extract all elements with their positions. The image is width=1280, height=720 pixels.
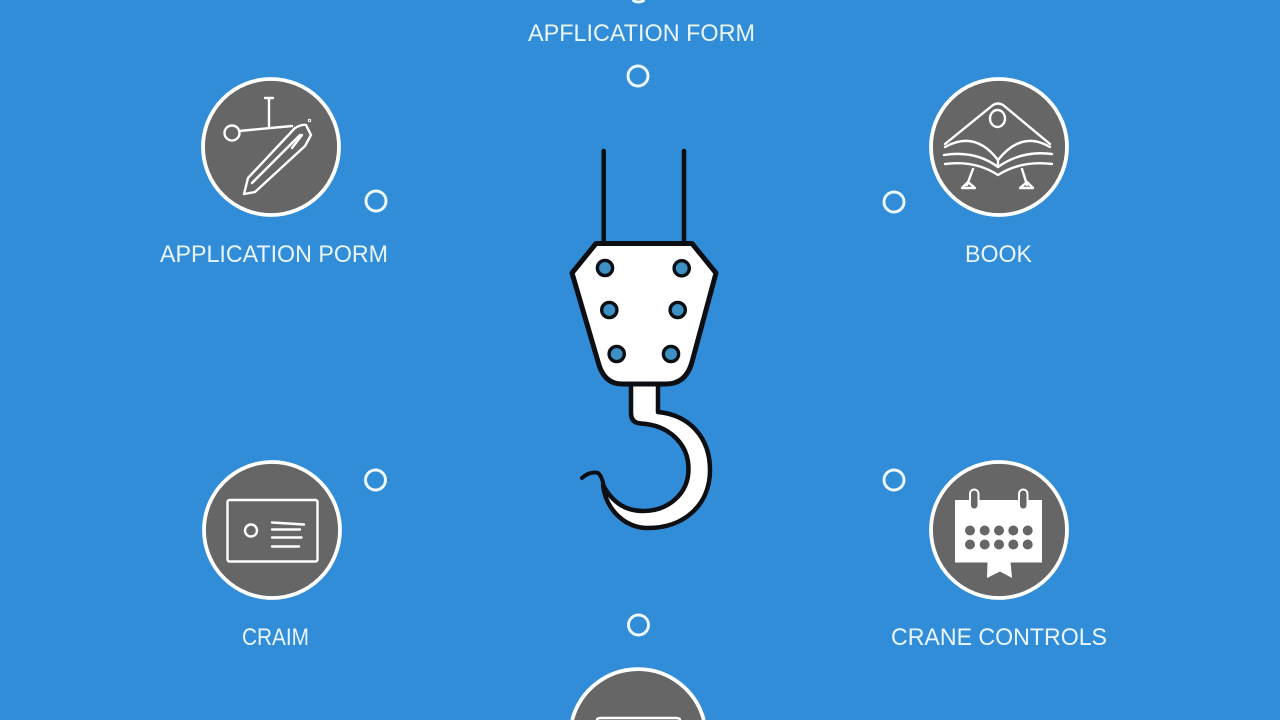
icon: cropped document bbox=[597, 718, 680, 720]
top partial node marker bbox=[632, 0, 644, 2]
node marker bbox=[366, 470, 386, 490]
icon disc: pen bbox=[203, 79, 339, 215]
icon: ID card bbox=[228, 500, 318, 562]
icon: open book with roof bbox=[944, 104, 1052, 188]
block bolts bbox=[597, 260, 689, 362]
panel: application form node bbox=[160, 79, 388, 268]
icon: calendar with ribbon bbox=[955, 490, 1042, 578]
panel: bottom node bbox=[572, 615, 704, 720]
label: book: BOOK bbox=[965, 241, 1032, 268]
panel: top application form label bbox=[528, 0, 755, 86]
node marker bbox=[628, 615, 648, 635]
label: crane controls: CRANE CONTROLS bbox=[891, 624, 1107, 651]
icon: pen and pin bbox=[224, 98, 311, 194]
node marker bbox=[366, 191, 386, 211]
node marker bbox=[884, 192, 904, 212]
hook tip bbox=[582, 473, 604, 487]
icon disc: book bbox=[931, 79, 1067, 215]
panel: book node bbox=[884, 79, 1067, 268]
hook bbox=[603, 382, 710, 528]
label: claim: CRAIM bbox=[242, 624, 309, 651]
heading: top label: APFLICATION FORM bbox=[528, 20, 755, 47]
cables bbox=[604, 151, 684, 244]
hook block bbox=[572, 244, 716, 384]
node marker bbox=[884, 470, 904, 490]
icon disc: cropped at the frame edge bbox=[572, 669, 704, 720]
panel: central crane hook bbox=[572, 151, 716, 528]
label: application form: APPLICATION PORM bbox=[160, 241, 388, 268]
panel: claim card node bbox=[204, 462, 386, 651]
panel: crane controls node bbox=[884, 462, 1107, 651]
icon disc: calendar bbox=[931, 462, 1067, 598]
icon disc: card bbox=[204, 462, 340, 598]
top node marker bbox=[628, 66, 648, 86]
